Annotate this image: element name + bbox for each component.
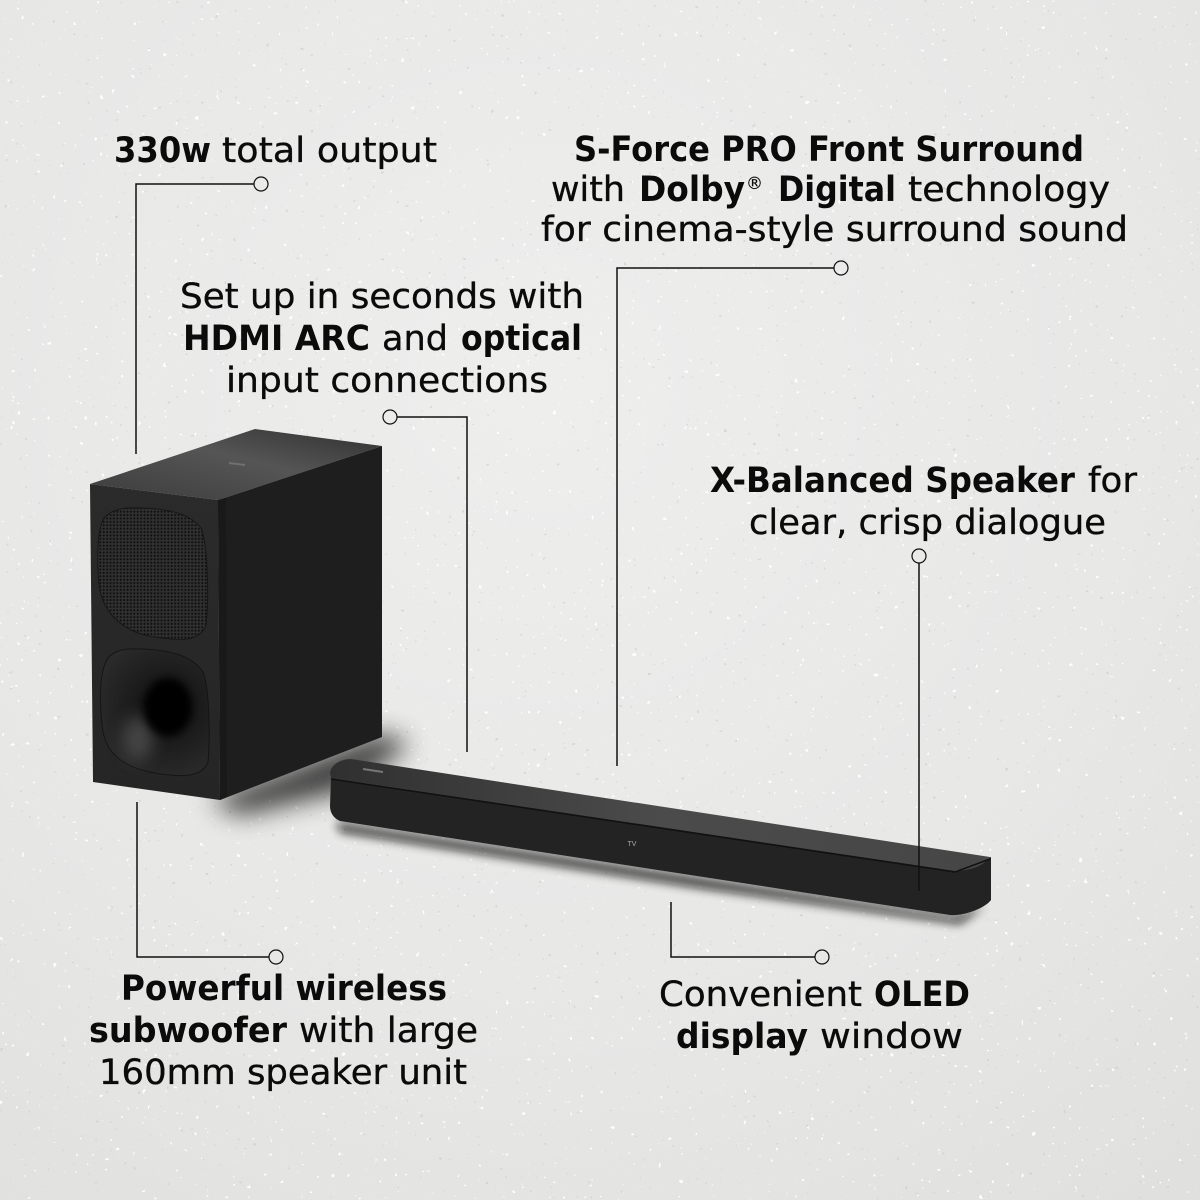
callout: front surround: Digital: [778, 170, 896, 210]
leader lines: [136, 177, 926, 964]
callout: connections: optical: [461, 319, 582, 359]
callout: connections: [180, 277, 584, 401]
leader: front surround: [617, 261, 848, 766]
subwoofer logo: [229, 463, 245, 465]
callout: front surround: technology: [908, 170, 1110, 210]
callout: speaker: for: [1088, 461, 1138, 501]
callout: OLED: display: [676, 1017, 808, 1057]
subwoofer corner band: [218, 498, 227, 800]
leader: speaker: [912, 549, 926, 891]
callout: front surround: for cinema-style surround sound: [541, 210, 1128, 250]
soundbar: [330, 759, 991, 915]
callout: speaker: clear, crisp dialogue: [749, 503, 1106, 543]
callout: total output: [114, 131, 437, 171]
subwoofer front face: [90, 484, 220, 800]
callout: connections: input connections: [226, 361, 548, 401]
subwoofer top face: [90, 429, 382, 500]
soundbar edge seam: [331, 779, 990, 872]
callout: OLED: OLED: [874, 975, 970, 1015]
leader: connections: [383, 410, 467, 752]
callout: OLED: [659, 975, 970, 1057]
soundbar TV label: TV: [628, 841, 637, 848]
callout: OLED: Convenient: [659, 975, 862, 1015]
callout: OLED: window: [820, 1017, 963, 1057]
callout: front surround: S-Force PRO Front Surround: [574, 130, 1084, 170]
soundbar logo: [363, 769, 383, 772]
callout: speaker: X-Balanced Speaker: [710, 461, 1076, 501]
callout: subwoofer: [89, 969, 478, 1093]
callout: front surround: Dolby: [639, 170, 745, 210]
callout: connections: and: [382, 319, 448, 359]
subwoofer: [90, 429, 382, 800]
callout: connections: Set up in seconds with: [180, 277, 584, 317]
callout: front surround: with: [551, 170, 625, 210]
subwoofer grille: [98, 508, 208, 639]
subwoofer bass port: [100, 649, 209, 776]
callout: front surround: [541, 130, 1128, 250]
soundbar front face: [330, 778, 991, 915]
leader: total output: [136, 177, 268, 454]
callout: total output: 330w: [114, 131, 211, 171]
callout: subwoofer: with large: [299, 1011, 478, 1051]
callout: connections: HDMI ARC: [183, 319, 370, 359]
callout: subwoofer: 160mm speaker unit: [99, 1053, 467, 1093]
callout: speaker: [710, 461, 1138, 543]
callout: subwoofer: Powerful wireless: [121, 969, 447, 1009]
callout: total output: total output: [222, 131, 437, 171]
soundbar top face: [330, 759, 990, 871]
product shadows: [210, 733, 985, 924]
callout: front surround: ®: [746, 174, 763, 194]
leader: OLED: [671, 902, 829, 964]
callout: subwoofer: subwoofer: [89, 1011, 288, 1051]
leader: subwoofer: [137, 802, 283, 964]
subwoofer side face: [218, 446, 382, 800]
